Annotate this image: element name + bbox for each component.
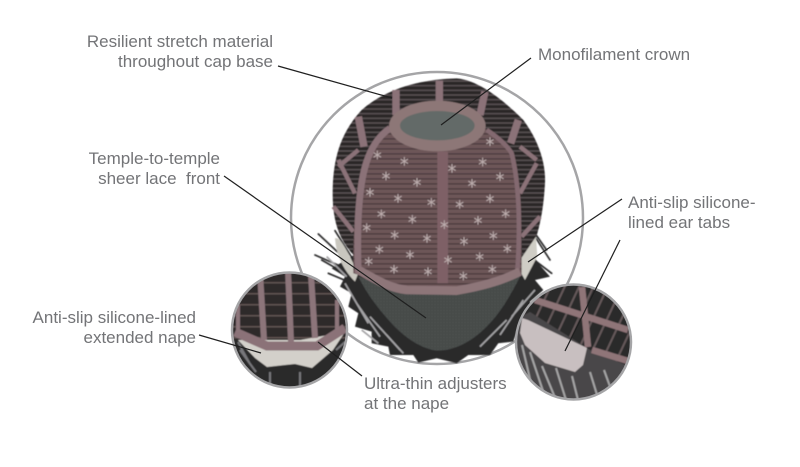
- label: adjusters: Ultra-thin adjusters: [364, 374, 507, 393]
- centre seam: [427, 152, 459, 283]
- right inset ring: [516, 284, 631, 400]
- cap straps: [333, 81, 540, 237]
- label: lace front: [89, 149, 220, 188]
- label: ear tabs: [628, 193, 756, 232]
- left inset photo: extended nape: [232, 270, 348, 388]
- nape hair highlights: [238, 342, 345, 388]
- cap side hair: [333, 78, 545, 257]
- label: extended nape: [32, 308, 196, 347]
- hair mass: [332, 250, 550, 363]
- large circle outline: [291, 72, 583, 364]
- main wig cap illustration: [315, 78, 552, 363]
- icon: loose hair spikes: [315, 231, 552, 287]
- ear tab right: [517, 237, 537, 280]
- label: stretch material: Resilient stretch material: [87, 32, 273, 51]
- lace centre panel: [353, 128, 522, 288]
- leader lines: [199, 58, 622, 376]
- label: stretch material: throughout cap base: [118, 52, 273, 71]
- label: lace front: Temple-to-temple: [89, 149, 220, 168]
- vertical straps: [260, 270, 315, 342]
- label: stretch material: [87, 32, 273, 71]
- left inset ring: [232, 272, 347, 388]
- star pattern: [363, 138, 511, 280]
- label: monofilament crown: Monofilament crown: [538, 45, 690, 64]
- label: extended nape: extended nape: [84, 328, 196, 347]
- sheer lace front: [358, 277, 520, 351]
- label: adjusters: at the nape: [364, 394, 449, 413]
- label: lace front: sheer lace front: [98, 169, 220, 188]
- label: extended nape: Anti-slip silicone-lined: [33, 308, 196, 327]
- lace hairline band: [358, 270, 520, 291]
- right inset photo: ear tab: [515, 283, 633, 401]
- right inset hair highlights: [522, 345, 612, 400]
- silicone ear tab: [520, 318, 587, 372]
- hair highlights: [327, 257, 535, 353]
- straps: [535, 287, 628, 361]
- ear tab left: [335, 238, 358, 282]
- label: ear tabs: Anti-slip silicone-: [628, 193, 756, 212]
- lace border: [358, 128, 390, 273]
- crown ring: [389, 101, 486, 151]
- label: adjusters: [364, 374, 507, 413]
- monofilament crown: [400, 111, 475, 140]
- nape band: [235, 328, 345, 346]
- nape silicone tab: [238, 332, 345, 368]
- label: ear tabs: lined ear tabs: [628, 213, 730, 232]
